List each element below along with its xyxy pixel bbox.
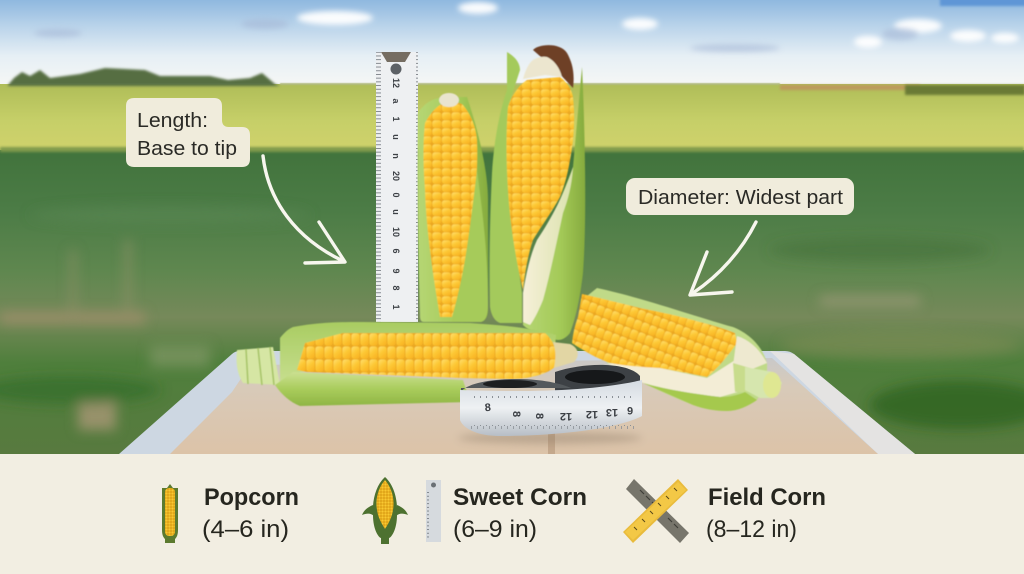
icon: sweet corn (362, 477, 408, 544)
label: popcorn: (4–6 in) (202, 516, 289, 543)
label: field corn: (8–12 in) (706, 516, 797, 543)
corn ear: right lying (572, 288, 782, 411)
ruler: 1 (391, 116, 401, 122)
ruler: 0 (391, 192, 401, 198)
measuring tape roll: 13 (606, 406, 618, 418)
label: field corn: Field Corn (708, 484, 826, 511)
corn ear: left lying (237, 322, 578, 406)
ruler (376, 52, 418, 322)
callout: diameter (626, 178, 854, 215)
arrow: diameter (690, 222, 756, 295)
icon: popcorn (162, 484, 178, 543)
label: field corn (706, 484, 826, 543)
callout: length: Length: (137, 110, 208, 132)
icon: crossed rulers (623, 479, 689, 543)
label: sweet corn (453, 484, 587, 543)
label: sweet corn: Sweet Corn (453, 484, 587, 511)
measuring tape roll: 8 (533, 413, 545, 419)
ruler: 10 (391, 227, 401, 237)
label: popcorn (202, 484, 299, 543)
callout: diameter: Diameter: Widest part (638, 186, 843, 209)
measuring tape roll: 8 (484, 402, 491, 414)
background: distant field and tree line (0, 68, 1024, 151)
label: sweet corn: (6–9 in) (453, 516, 537, 543)
ruler: u (391, 134, 401, 140)
measuring tape roll: 6 (627, 404, 633, 416)
ruler: 6 (391, 248, 401, 254)
measuring tape roll: 8 (510, 411, 522, 417)
background: green field (0, 147, 1024, 454)
ruler: 12 (391, 78, 401, 88)
ruler: 1 (391, 304, 401, 310)
measuring tape roll: 12 (586, 408, 598, 420)
legend bar (0, 454, 1024, 574)
callout: length: Base to tip (137, 138, 237, 160)
ruler: a (391, 98, 401, 104)
corn ear: tall upright (490, 45, 585, 340)
table (119, 351, 915, 454)
measuring tape roll: 12 (560, 410, 572, 422)
icon: small ruler (426, 480, 441, 542)
ruler: n (391, 153, 401, 159)
arrow: length (263, 156, 345, 263)
ruler: u (391, 209, 401, 215)
ruler: 8 (391, 285, 401, 291)
label: popcorn: Popcorn (204, 484, 299, 511)
background: sky (0, 0, 1024, 86)
corn ear: middle upright (418, 93, 488, 322)
callout: length (126, 98, 250, 167)
ruler: 20 (391, 171, 401, 181)
ruler: 9 (391, 268, 401, 274)
measuring tape roll (458, 365, 642, 444)
